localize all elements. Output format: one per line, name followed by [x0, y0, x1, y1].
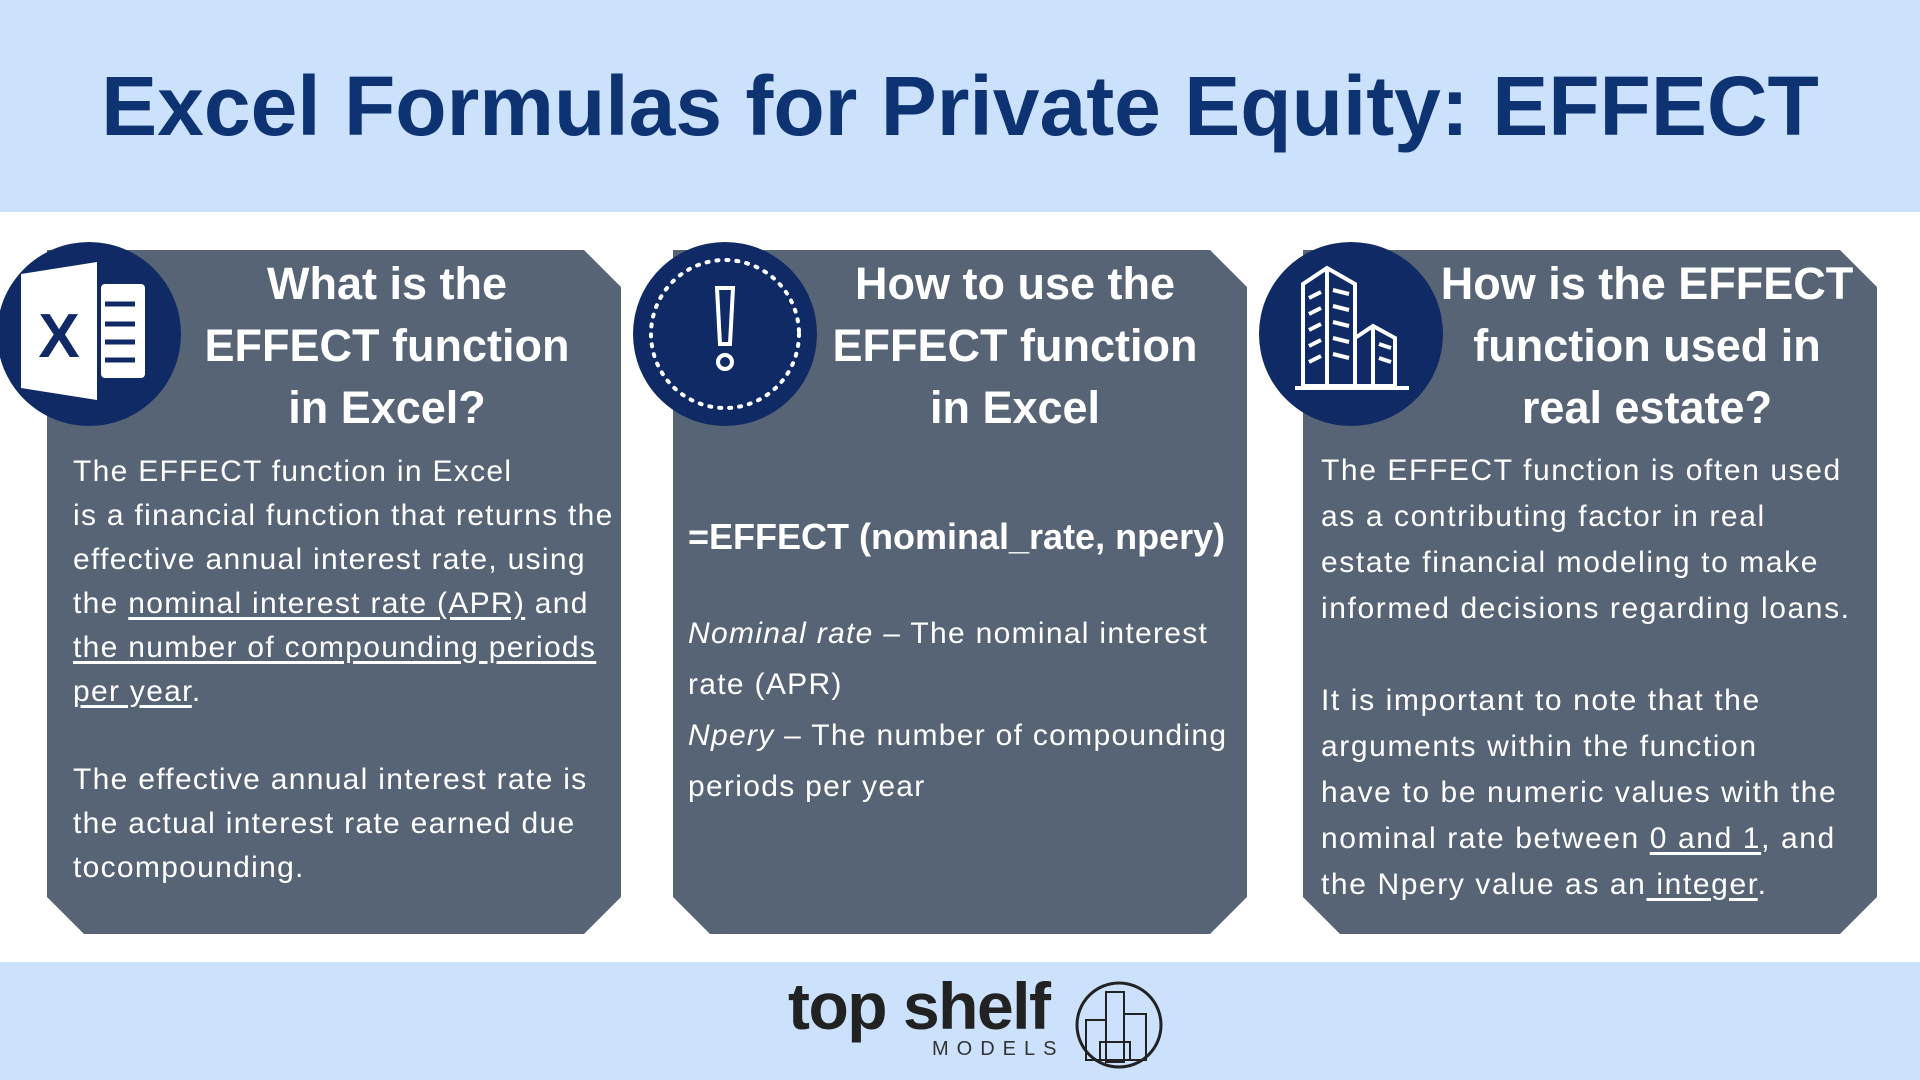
heading: How is the EFFECT — [1441, 258, 1853, 309]
text: The EFFECT function is often used — [1321, 454, 1842, 487]
heading: What is the — [267, 258, 507, 309]
text: the number of compounding periods — [73, 631, 596, 664]
panel: what is — [0, 242, 621, 934]
heading — [1441, 258, 1853, 433]
heading: How to use the — [855, 258, 1175, 309]
argument descriptions: periods per year — [688, 770, 926, 803]
argument descriptions — [688, 617, 1227, 803]
footer band — [0, 962, 1920, 1080]
icon: buildings — [1259, 242, 1443, 426]
logo: MODELS — [932, 1038, 1064, 1060]
text: as a contributing factor in real — [1321, 500, 1766, 533]
argument descriptions: Nominal rate – The nominal interest — [688, 617, 1208, 650]
text — [1321, 454, 1851, 901]
panel: real estate — [1259, 242, 1877, 934]
logo: top shelf — [788, 969, 1050, 1043]
text: the actual interest rate earned due — [73, 807, 575, 840]
text: nominal rate between 0 and 1, and — [1321, 822, 1836, 855]
text: effective annual interest rate, using — [73, 543, 586, 576]
heading: function used in — [1473, 320, 1821, 371]
header band — [0, 0, 1920, 212]
heading — [205, 258, 569, 433]
logo — [788, 969, 1162, 1068]
icon: exclamation — [633, 242, 817, 426]
argument descriptions: rate (APR) — [688, 668, 843, 701]
heading: real estate? — [1522, 382, 1772, 433]
heading: EFFECT function — [833, 320, 1197, 371]
icon: excel — [0, 242, 181, 426]
title: Excel Formulas for Private Equity: EFFECT — [101, 59, 1819, 153]
icon: excel: X — [38, 302, 80, 371]
text: the nominal interest rate (APR) and — [73, 587, 589, 620]
argument descriptions: Npery – The number of compounding — [688, 719, 1227, 752]
panel: how to use — [633, 242, 1247, 934]
text: estate financial modeling to make — [1321, 546, 1819, 579]
heading: in Excel — [930, 382, 1100, 433]
text: have to be numeric values with the — [1321, 776, 1837, 809]
text: is a financial function that returns the — [73, 499, 614, 532]
text — [73, 455, 614, 884]
text: per year. — [73, 675, 201, 708]
text: informed decisions regarding loans. — [1321, 592, 1851, 625]
text: arguments within the function — [1321, 730, 1758, 763]
text: The EFFECT function in Excel — [73, 455, 512, 488]
heading: EFFECT function — [205, 320, 569, 371]
text: the Npery value as an integer. — [1321, 868, 1768, 901]
text: The effective annual interest rate is — [73, 763, 587, 796]
heading — [833, 258, 1197, 433]
formula: =EFFECT (nominal_rate, npery) — [688, 516, 1225, 557]
heading: in Excel? — [288, 382, 486, 433]
text: It is important to note that the — [1321, 684, 1761, 717]
text: tocompounding. — [73, 851, 305, 884]
